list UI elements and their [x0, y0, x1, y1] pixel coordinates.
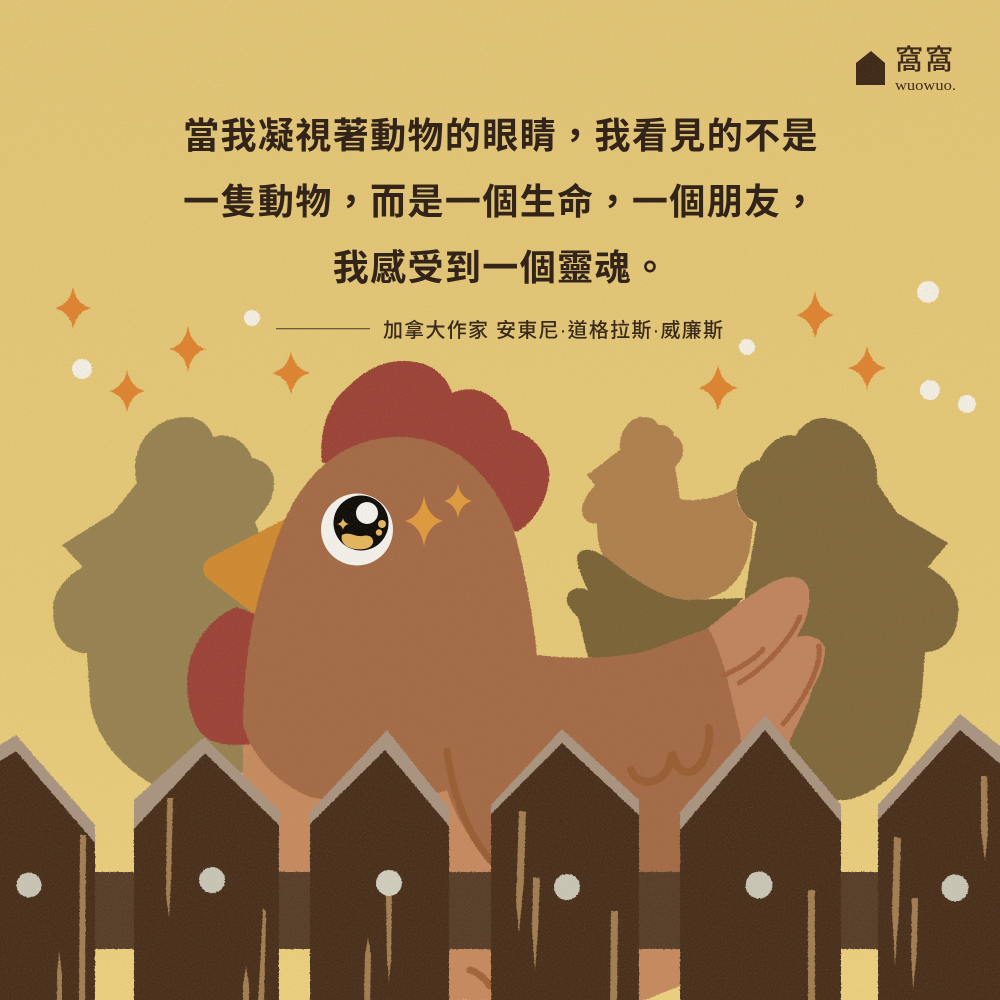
picket 3: [310, 730, 449, 1000]
logo: [856, 44, 956, 94]
wing strokes on tail: [723, 617, 819, 724]
lower body and legs: [243, 725, 682, 1000]
comb: [321, 361, 549, 532]
rail: [0, 872, 1000, 949]
icon: house: [856, 51, 885, 85]
small hen silhouette: [582, 417, 753, 600]
highlight: [356, 502, 378, 524]
white dots: [72, 281, 976, 413]
orange sparkles: [55, 287, 886, 412]
logo wordmark: wuowuo.: [895, 78, 956, 94]
tail feather back: [700, 577, 825, 790]
eye white: [321, 494, 393, 566]
picket 2: [134, 737, 279, 1000]
dark wing: [567, 550, 743, 662]
left olive silhouette: [53, 417, 300, 792]
attribution: 加拿大作家 安東尼·道格拉斯·威廉斯: [383, 318, 723, 342]
main hen: [187, 361, 825, 1000]
title quote: 當我凝視著動物的眼睛，我看見的不是: [183, 115, 819, 156]
eye gold reflections: [337, 518, 386, 549]
picket 6: [878, 714, 1000, 1000]
pupil: [334, 496, 388, 550]
feather strokes on body: [447, 728, 709, 986]
picket 1: [0, 735, 95, 1000]
title quote: [183, 115, 819, 288]
picket 4: [491, 729, 639, 1000]
head and body: [243, 437, 750, 880]
beak: [203, 518, 287, 617]
eye: [321, 484, 472, 566]
sparkles and dots in the sky: [55, 281, 976, 413]
title quote: 一隻動物，而是一個生命，一個朋友，: [183, 181, 819, 222]
right brown silhouette: [737, 418, 958, 800]
face sparkles: [405, 484, 472, 546]
wattle: [187, 607, 270, 745]
logo characters: 窩窩: [895, 44, 953, 75]
fence: [0, 714, 1000, 1000]
picket 5: [680, 715, 841, 1000]
background chickens: [53, 417, 958, 800]
title quote: 我感受到一個靈魂。: [333, 247, 669, 288]
